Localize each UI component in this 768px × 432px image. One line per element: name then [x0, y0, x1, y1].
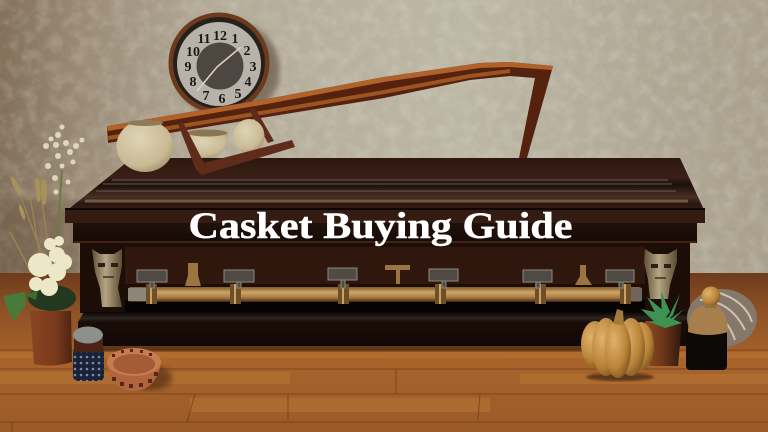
casket: [65, 158, 705, 346]
cream vase: [116, 120, 174, 172]
flower pot with white blooms: [3, 236, 76, 366]
clock: 10: [186, 45, 200, 60]
title: Casket Buying Guide: [188, 206, 572, 247]
casket body: [80, 243, 690, 313]
jar: [73, 326, 104, 381]
clock: 9: [184, 60, 192, 75]
black and gold jar: [686, 286, 728, 370]
casket lid band: [73, 223, 697, 243]
clock: 12: [213, 29, 227, 44]
clock: 11: [197, 32, 211, 47]
woven basket: [107, 348, 172, 391]
clock hands: [197, 47, 241, 91]
left mask: [92, 249, 122, 307]
rail knobs: [185, 263, 592, 286]
casket base: [78, 312, 690, 346]
wooden stand: [178, 122, 295, 175]
clock: 4: [244, 75, 252, 90]
clock: 1: [232, 32, 238, 47]
textured ball ornament: [687, 289, 757, 347]
casket lid top: [65, 158, 705, 212]
clock: 6: [218, 92, 226, 107]
gold pumpkin: [581, 309, 654, 381]
clock: 5: [234, 87, 242, 102]
rail brackets: [137, 268, 634, 288]
dried grass: [10, 175, 52, 270]
right mask: [644, 249, 677, 299]
clock: [168, 12, 280, 120]
succulent in copper pot: [641, 291, 684, 366]
clock: 7: [202, 89, 210, 104]
brass rail: [128, 284, 642, 304]
cream bowl: [186, 130, 228, 158]
clock: 3: [250, 60, 256, 75]
clock: 2: [244, 44, 250, 59]
wooden rod: [107, 62, 553, 158]
wooden floor: [0, 273, 768, 432]
white flower sprig: [43, 124, 84, 270]
clock: 8: [190, 75, 196, 90]
wall background: [0, 0, 768, 276]
cream egg: [234, 119, 264, 153]
wooden stand right arm: [249, 108, 274, 143]
